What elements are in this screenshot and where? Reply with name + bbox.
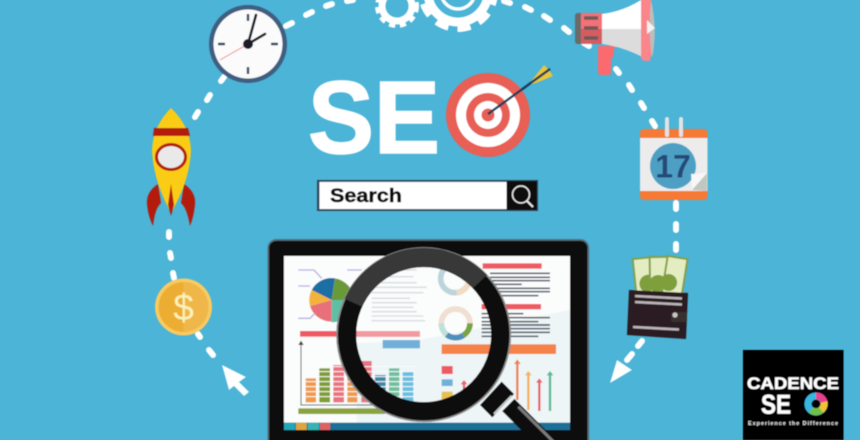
icon: megaphone [575,0,655,75]
icon: calendar showing 17 [640,119,708,200]
text block: top right [483,263,550,296]
search bar [317,180,538,211]
title: SEO [308,60,553,175]
legend squares [442,366,453,399]
monitor with dashboard [268,240,588,440]
screen [284,256,570,430]
magnifying glass [337,248,562,440]
icon: target with arrow [446,65,553,157]
pie chart [298,270,362,322]
arrow chart [461,359,553,411]
arrowhead: lower right of path [610,360,632,383]
icon: calendar showing 17: 17 [655,148,691,184]
search bar: Search [330,185,402,207]
logo: Cadence SEO: Experience the Difference [748,421,838,427]
dashed circular path [169,0,676,360]
handle [480,382,562,440]
heading bars [300,331,556,354]
text block: middle right [482,304,550,336]
icon: gold dollar coin [155,278,212,336]
icon: gears [378,0,494,28]
icon: gold dollar coin: $ [173,287,194,328]
title: SEO: SE [308,60,440,175]
lens text lines [372,270,427,321]
icon: clock [209,5,287,83]
icon: rocket [147,108,195,226]
logo: Cadence SEO: SE [761,390,791,420]
icon: search magnifier [512,186,533,207]
logo ring [808,396,824,412]
logo: Cadence SEO: CADENCE [747,375,839,393]
logo: Cadence SEO [743,350,844,440]
banknotes [633,255,687,299]
icon: cursor arrow [222,365,249,396]
icon: wallet with banknotes [627,255,688,339]
bar chart [298,341,415,414]
donut charts [441,264,470,338]
